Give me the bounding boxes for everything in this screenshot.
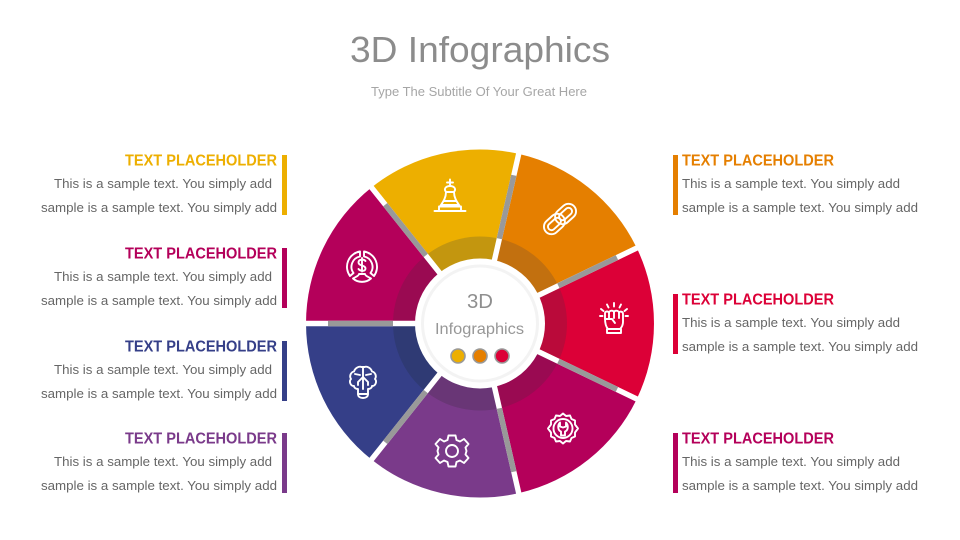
panel: right text 2 (673, 292, 918, 354)
icon: chain link (541, 201, 579, 237)
panel: left text 2: This is a sample text. You simply add (54, 269, 272, 284)
center label: 3D (467, 291, 493, 313)
segment: purple (347, 324, 519, 523)
center colour dots (451, 349, 509, 363)
icon: gear (436, 436, 468, 466)
panel: right text 1: sample is a sample text. You simply add (682, 200, 918, 215)
panel: left text 4 (41, 430, 287, 493)
panel: left text 3: sample is a sample text. You simply add (41, 386, 277, 401)
center label: Infographics (435, 321, 524, 338)
panel: left text 4: TEXT PLACEHOLDER (125, 430, 277, 448)
panel: left text 2: TEXT PLACEHOLDER (125, 246, 277, 262)
segment: orange (480, 154, 651, 354)
segment: magenta lower (421, 324, 637, 522)
icon: raised fist (600, 303, 628, 333)
panel: right text 2: This is a sample text. You simply add (682, 315, 900, 330)
panel: right text 1 (673, 152, 918, 215)
panel: left text 2 (41, 246, 287, 308)
icon: dollar target (347, 252, 377, 282)
panel: left text 3: TEXT PLACEHOLDER (125, 338, 277, 356)
panel: left text 1: This is a sample text. You simply add (54, 176, 272, 191)
panel: left text 4: sample is a sample text. You simply add (41, 478, 277, 493)
icon: brain light bulb (350, 367, 376, 398)
panel: left text 4: This is a sample text. You simply add (54, 454, 272, 469)
panel: left text 1 (41, 152, 287, 215)
panel: left text 1: sample is a sample text. You simply add (41, 200, 277, 215)
center label (435, 291, 524, 338)
icon: chess king (434, 180, 466, 211)
separators (300, 148, 642, 499)
panel: right text 2: sample is a sample text. You simply add (682, 339, 918, 354)
panel: left text 3: This is a sample text. You simply add (54, 362, 272, 377)
panel: right text 2: TEXT PLACEHOLDER (682, 292, 834, 308)
chart: seven segment wheel (265, 103, 696, 523)
panel: right text 3: TEXT PLACEHOLDER (682, 430, 834, 448)
panel: left text 2: sample is a sample text. You simply add (41, 293, 277, 308)
panel: right text 1: This is a sample text. You simply add (682, 176, 900, 191)
segment: magenta upper (306, 188, 480, 324)
panel: left text 3 (41, 338, 287, 401)
segment: navy (265, 239, 480, 460)
segment: red (480, 248, 696, 446)
panel: left text 1: TEXT PLACEHOLDER (125, 152, 277, 170)
segment: yellow (372, 103, 586, 324)
panel: right text 3: This is a sample text. You simply add (682, 454, 900, 469)
panel: right text 1: TEXT PLACEHOLDER (682, 152, 834, 170)
panel: right text 3: sample is a sample text. You simply add (682, 478, 918, 493)
icon: gear with wrench (548, 414, 578, 444)
title: 3D Infographics (350, 29, 610, 70)
center disc (415, 258, 545, 388)
panel: right text 3 (673, 430, 918, 493)
subtitle: Type The Subtitle Of Your Great Here (371, 84, 587, 99)
